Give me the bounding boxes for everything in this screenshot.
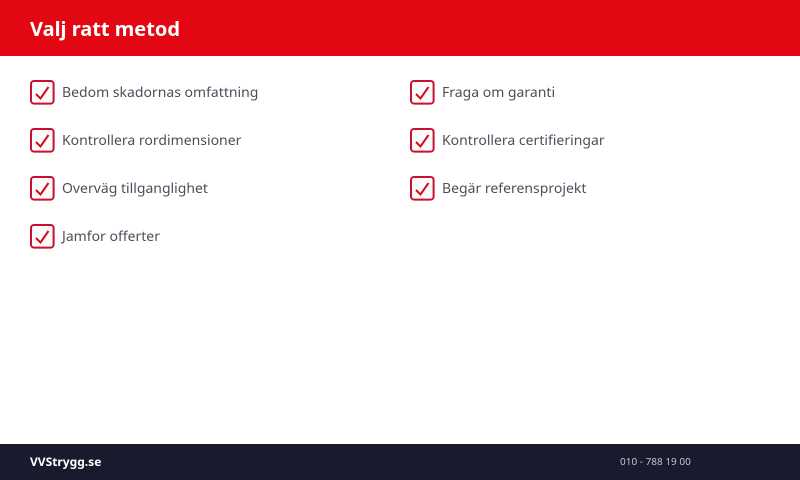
- checklist item: Bedom skadornas omfattning: Bedom skadornas omfattning: [62, 83, 258, 102]
- checklist item: Bedom skadornas omfattning: [30, 80, 258, 105]
- checklist item: Overvag tillganglighet: Overväg tillganglighet: [62, 179, 208, 198]
- checklist item: Begar referensprojekt: Begär referensprojekt: [442, 179, 586, 198]
- checklist item: Kontrollera certifieringar: Kontrollera certifieringar: [442, 131, 605, 150]
- checklist item: Overvag tillganglighet: [30, 176, 208, 201]
- checklist item: Kontrollera rordimensioner: [30, 128, 242, 153]
- checklist item: Jamfor offerter: Jamfor offerter: [62, 227, 160, 246]
- header band: [0, 0, 800, 56]
- checklist item: Fraga om garanti: Fraga om garanti: [442, 83, 555, 102]
- checklist item: Begar referensprojekt: [410, 176, 586, 201]
- footer band: [0, 444, 800, 480]
- checklist item: Kontrollera rordimensioner: Kontrollera rordimensioner: [62, 131, 241, 150]
- phone number: 010 - 788 19 00: [620, 454, 691, 468]
- checklist item: Kontrollera certifieringar: [410, 128, 605, 153]
- checklist item: Jamfor offerter: [30, 224, 160, 249]
- checklist item: Fraga om garanti: [410, 80, 555, 105]
- title: Valj ratt metod: [30, 15, 180, 42]
- brand name: VVStrygg.se: [30, 453, 101, 470]
